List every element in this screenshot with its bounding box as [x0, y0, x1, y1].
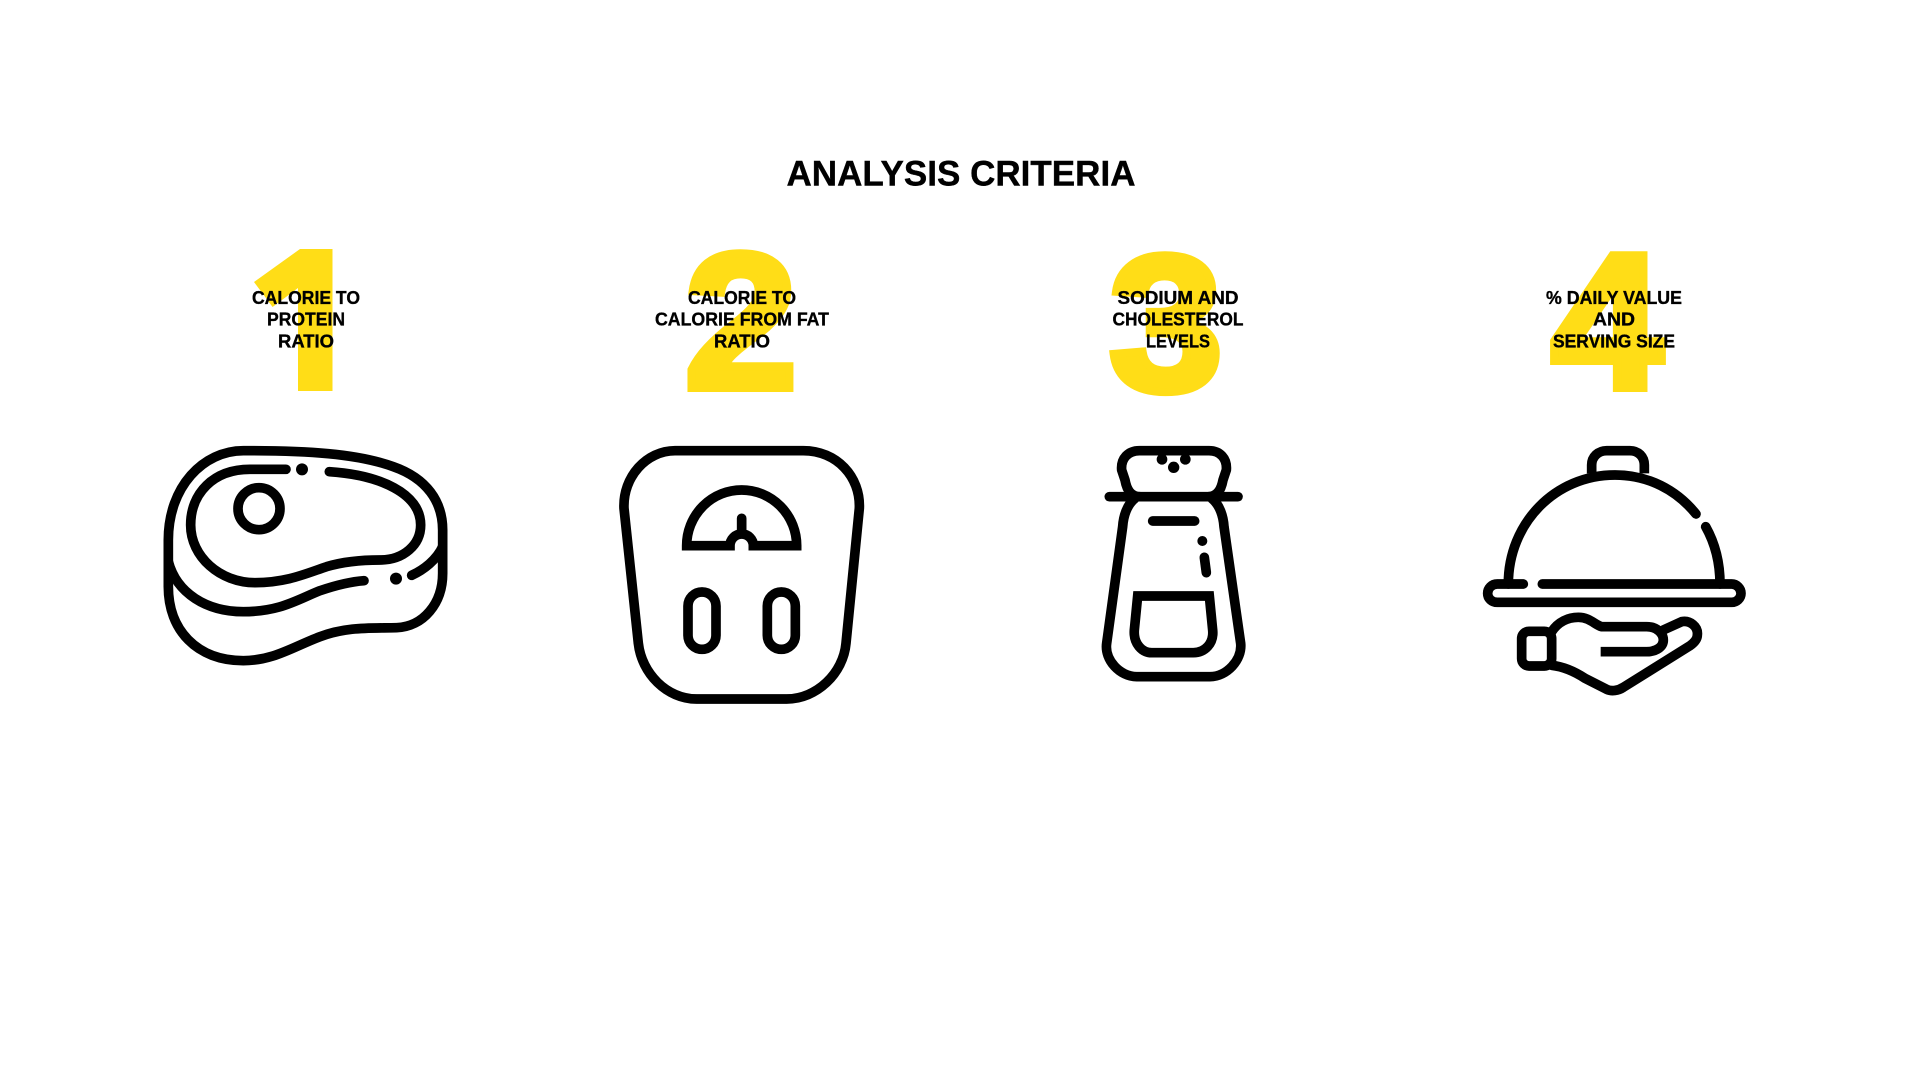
icon: serving cloche on hand [1488, 451, 1741, 691]
panel: criterion 3 [1106, 216, 1244, 677]
label: sodium and cholesterol levels: SODIUM AND [1118, 287, 1238, 308]
number 4: 4 [1551, 214, 1663, 429]
label: calorie to protein ratio: CALORIE TO [252, 287, 360, 308]
label: daily value and serving size [1546, 287, 1682, 351]
panel: criterion 2 [624, 213, 859, 699]
label: daily value and serving size: AND [1593, 309, 1635, 330]
icon: salt shaker [1106, 451, 1241, 677]
number 1: 1 [254, 213, 362, 429]
label: calorie to protein ratio: RATIO [278, 330, 334, 351]
label: calorie to calorie from fat ratio: CALORIE FROM FAT [655, 309, 830, 330]
title: ANALYSIS CRITERIA [786, 154, 1136, 194]
number 3: 3 [1109, 216, 1223, 432]
label: calorie to protein ratio: PROTEIN [267, 309, 345, 330]
panel: criterion 4 [1488, 214, 1741, 691]
label: calorie to calorie from fat ratio [655, 287, 830, 351]
label: calorie to calorie from fat ratio: RATIO [714, 330, 770, 351]
icon: weighing scale [624, 451, 859, 699]
label: calorie to protein ratio [252, 287, 360, 351]
icon: steak [168, 451, 443, 661]
label: daily value and serving size: SERVING SIZE [1553, 330, 1675, 351]
label: sodium and cholesterol levels: CHOLESTEROL [1112, 309, 1244, 330]
label: sodium and cholesterol levels: LEVELS [1146, 330, 1210, 351]
panel: criterion 1 [168, 213, 443, 661]
label: calorie to calorie from fat ratio: CALORIE TO [688, 287, 796, 308]
label: sodium and cholesterol levels [1112, 287, 1244, 351]
label: daily value and serving size: % DAILY VALUE [1546, 287, 1682, 308]
number 2: 2 [685, 213, 797, 429]
